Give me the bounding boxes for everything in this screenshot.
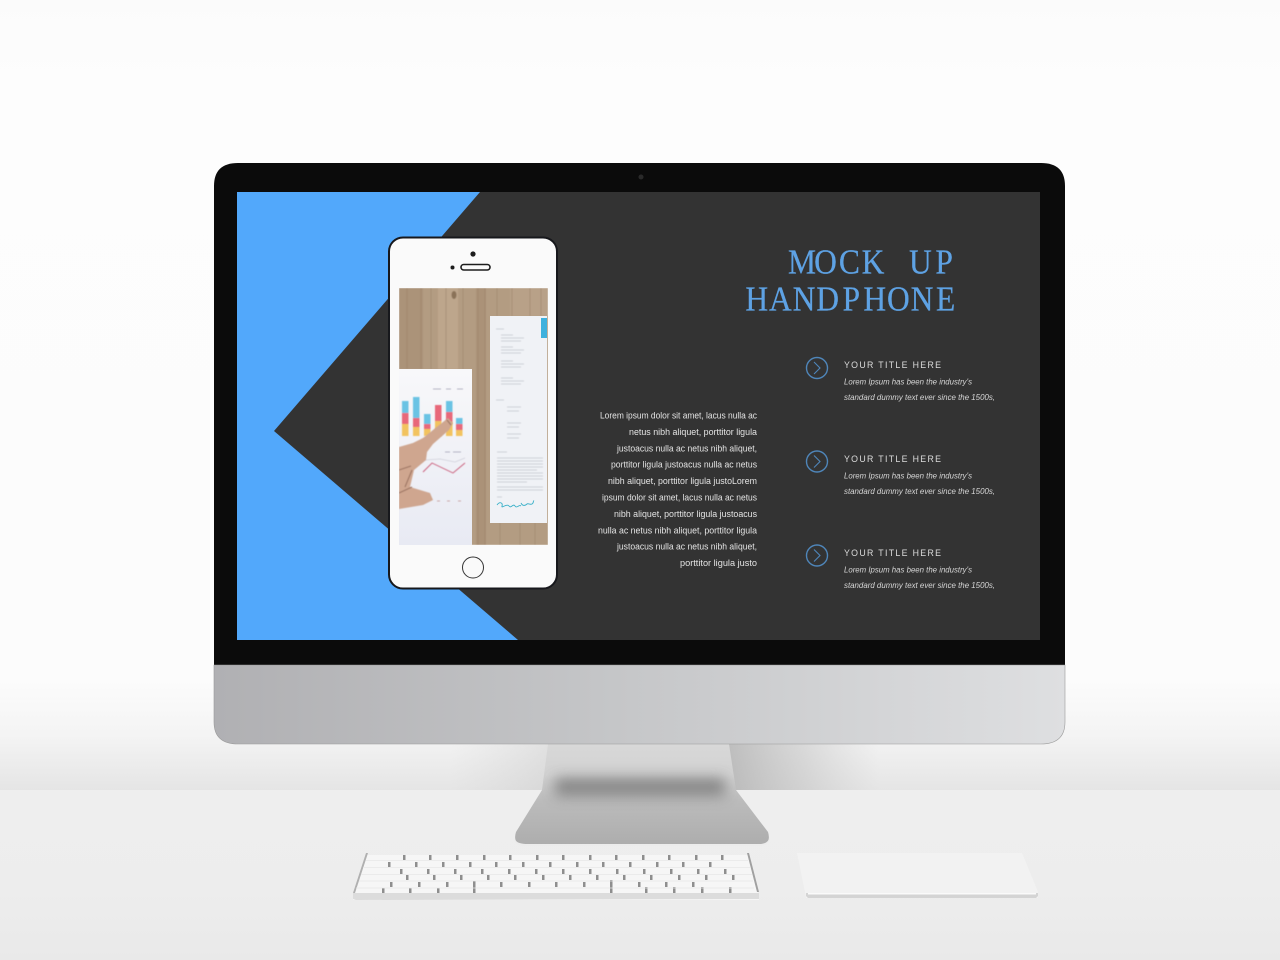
item title: YOUR TITLE HERE (844, 548, 941, 558)
icon: chevron circle (806, 358, 828, 378)
left chart document (399, 369, 472, 545)
icon: chevron circle (806, 451, 828, 472)
monitor shadow on wall, right (729, 744, 879, 790)
webcam (638, 174, 644, 180)
body paragraph: Lorem ipsum dolor sit amet, lacus nulla ac (600, 410, 757, 422)
body paragraph: ipsum dolor sit amet, lacus nulla ac netus (602, 492, 757, 504)
row separators (356, 860, 754, 888)
list item 2 (806, 451, 995, 496)
phone speaker (461, 264, 490, 270)
icon: chevron circle (806, 545, 828, 566)
phone sensor (450, 266, 454, 270)
body paragraph: netus nibh aliquet, porttitor ligula (629, 427, 758, 438)
body paragraph (598, 410, 758, 569)
item description: Lorem Ipsum has been the industry's (844, 376, 973, 386)
title: HANDPHONE (745, 280, 955, 319)
item description: standard dummy text ever since the 1500s, (844, 486, 995, 496)
monitor body (214, 163, 1065, 744)
monitor shadow on wall, left (450, 744, 548, 790)
document signature squiggle (497, 501, 534, 507)
item description: standard dummy text ever since the 1500s, (844, 392, 995, 402)
keyboard (353, 853, 759, 900)
body paragraph: justoacus nulla ac netus nibh aliquet, (616, 443, 757, 454)
body paragraph: nulla ac netus nibh aliquet, porttitor ligula (598, 525, 758, 536)
key gaps (382, 855, 734, 893)
phone camera (470, 251, 476, 257)
desk surface (0, 790, 1280, 960)
blue document tab (541, 318, 547, 338)
dark slide background (237, 192, 1040, 640)
item description (844, 376, 995, 402)
right resume document (490, 316, 547, 523)
list item 3 (806, 545, 995, 590)
pointing hand (399, 418, 453, 509)
phone body (389, 238, 557, 588)
monitor bezel (214, 163, 1065, 665)
body paragraph: justoacus nulla ac netus nibh aliquet, (616, 542, 757, 553)
trackpad (797, 853, 1038, 898)
blue arrow-cut shape (237, 192, 518, 640)
item description: standard dummy text ever since the 1500s, (844, 580, 995, 590)
monitor chin (214, 665, 1065, 744)
title (745, 243, 955, 319)
bar chart in photo (402, 389, 463, 452)
screen slide (237, 192, 1040, 640)
item title: YOUR TITLE HERE (844, 360, 941, 370)
body paragraph: nibh aliquet, porttitor ligula justoacus (614, 509, 757, 520)
title: MOCK UP (788, 243, 953, 282)
phone photo: charts on a wooden desk (399, 288, 548, 545)
body paragraph: nibh aliquet, porttitor ligula justoLorem (608, 476, 757, 487)
keyboard body (353, 855, 759, 900)
item title: YOUR TITLE HERE (844, 454, 941, 464)
document text lines (496, 329, 543, 497)
item description: Lorem Ipsum has been the industry's (844, 564, 973, 574)
item description (844, 470, 995, 496)
phone home button (462, 557, 484, 578)
monitor stand (514, 744, 770, 846)
item description (844, 564, 995, 590)
list item 1 (806, 358, 995, 402)
phone mockup (389, 238, 557, 588)
body paragraph: porttitor ligula justoacus nulla ac netus (611, 460, 757, 471)
body paragraph: porttitor ligula justo (680, 558, 757, 569)
item description: Lorem Ipsum has been the industry's (844, 470, 973, 480)
wood tabletop (399, 288, 548, 545)
line chart in photo (423, 458, 465, 501)
